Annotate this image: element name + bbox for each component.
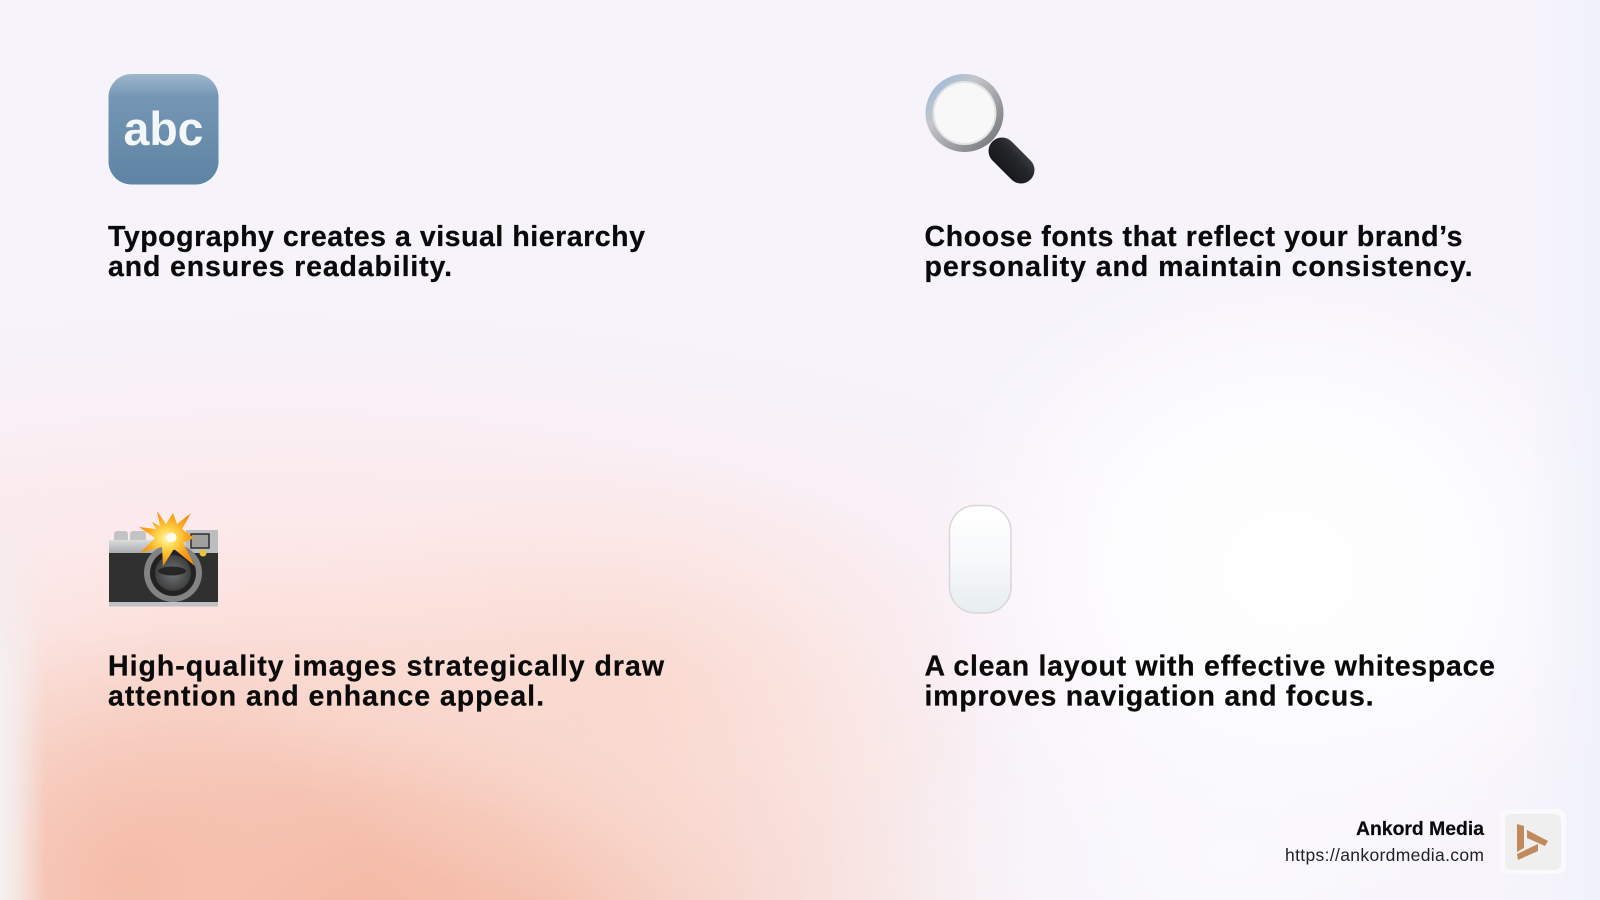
footer brand [1285,809,1566,874]
text block: images [108,650,665,712]
brand name: Ankord Media [1356,819,1484,840]
website url: https://ankordmedia.com [1285,845,1484,865]
logo [1500,809,1566,874]
icon: magnifying glass [926,74,1021,170]
text block: layout: improves navigation and focus. [924,680,1374,712]
text block: typography: and ensures readability. [108,251,452,283]
text block: typography [108,221,645,283]
text block: images: attention and enhance appeal. [108,680,544,712]
icon: computer mouse [950,506,1011,613]
text block: typography: Typography creates a visual hierarchy [108,221,645,253]
text block: brand fonts: Choose fonts that reflect your brand’s [924,221,1462,253]
text block: images: High-quality images strategically draw [108,650,665,682]
text block: brand fonts [924,221,1472,283]
icon: camera with flash [109,511,218,606]
icon: abc input symbols: abc [124,102,204,155]
text block: layout [924,650,1495,712]
text block: brand fonts: personality and maintain consistency. [924,251,1472,283]
icon: abc input symbols [108,74,218,184]
text block: layout: A clean layout with effective whitespace [924,650,1495,682]
background gradient [0,396,1486,900]
